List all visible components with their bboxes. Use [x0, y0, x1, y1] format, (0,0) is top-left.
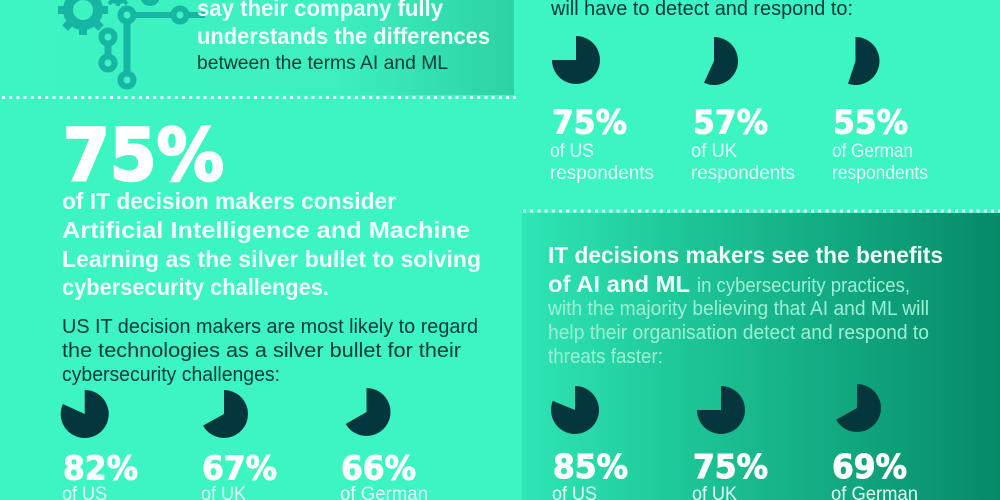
benefits text	[547, 242, 943, 368]
divider: top left dotted	[2, 96, 520, 99]
benefits text: with the majority believing that AI and ML will	[547, 298, 929, 320]
benefits text: in cybersecurity practices,	[697, 275, 910, 297]
stat: German 55%: 55%	[833, 102, 908, 142]
stat: German 66%: 66%	[341, 448, 416, 488]
panel: left silver bullet	[61, 113, 481, 500]
stat: US 85%: 85%	[553, 447, 628, 486]
US silver bullet text: the technologies as a silver bullet for their	[62, 340, 461, 362]
pie: US 75%	[552, 36, 600, 84]
stat: UK 75%: 75%	[693, 447, 768, 486]
benefits text: IT decisions makers see the benefits	[548, 242, 943, 268]
pie: UK 67%	[203, 390, 248, 438]
stat: US 75%: respondents	[550, 163, 654, 184]
benefits text: help their organisation detect and respond to	[548, 322, 929, 344]
benefits text: of AI and ML	[548, 271, 690, 297]
silver bullet statement: of IT decision makers consider	[62, 188, 396, 214]
pie: US 82%	[61, 390, 109, 438]
stat: UK 75%	[692, 447, 768, 500]
stat: UK 67%: 67%	[202, 448, 277, 488]
heading: top left statement: between the terms AI and ML	[197, 53, 448, 74]
stat: US 82%: 82%	[63, 448, 138, 488]
heading: top left statement	[197, 0, 490, 74]
panel: top left banner	[0, 0, 514, 95]
silver bullet statement	[62, 188, 481, 300]
stat: German 66%	[340, 448, 428, 500]
icon: gears and circuit	[58, 0, 205, 86]
pie: UK 57%	[704, 37, 738, 85]
silver bullet statement: cybersecurity challenges.	[62, 274, 329, 300]
stat: US 75%: of US	[550, 141, 594, 162]
silver bullet statement: Learning as the silver bullet to solving	[62, 246, 481, 272]
pie: US 85%	[551, 386, 599, 434]
stat: German 55%	[832, 102, 928, 184]
panel: bottom right benefits	[522, 213, 1000, 500]
silver bullet statement: Artificial Intelligence and Machine	[62, 217, 470, 243]
stat: UK 57%	[691, 102, 795, 184]
stat: US 85%	[552, 447, 628, 500]
stat: UK 57%: 57%	[693, 102, 768, 142]
big number 75%: 75%	[63, 113, 224, 197]
US silver bullet text	[62, 316, 478, 386]
stat: US 75%: 75%	[552, 102, 627, 142]
pie: UK 75%	[697, 386, 745, 434]
benefits text: threats faster:	[548, 346, 663, 368]
US silver bullet text: US IT decision makers are most likely to regard	[62, 316, 478, 338]
stat: UK 57%: respondents	[691, 163, 795, 184]
stat: US 75%	[550, 102, 654, 184]
stat: UK 57%: of UK	[691, 141, 737, 162]
pie: German 66%	[346, 388, 390, 436]
US silver bullet text: cybersecurity challenges:	[62, 364, 280, 386]
stat: German 69%: 69%	[832, 447, 907, 486]
pie: German 55%	[848, 37, 879, 85]
heading: top left statement: understands the differences	[197, 23, 490, 49]
stat: German 55%: of German	[832, 141, 913, 162]
stat: German 55%: respondents	[832, 163, 928, 184]
pie: German 69%	[836, 384, 881, 432]
panel: top right threats	[550, 0, 928, 184]
stat: German 69%	[831, 447, 918, 500]
divider: right dotted	[523, 210, 1000, 212]
